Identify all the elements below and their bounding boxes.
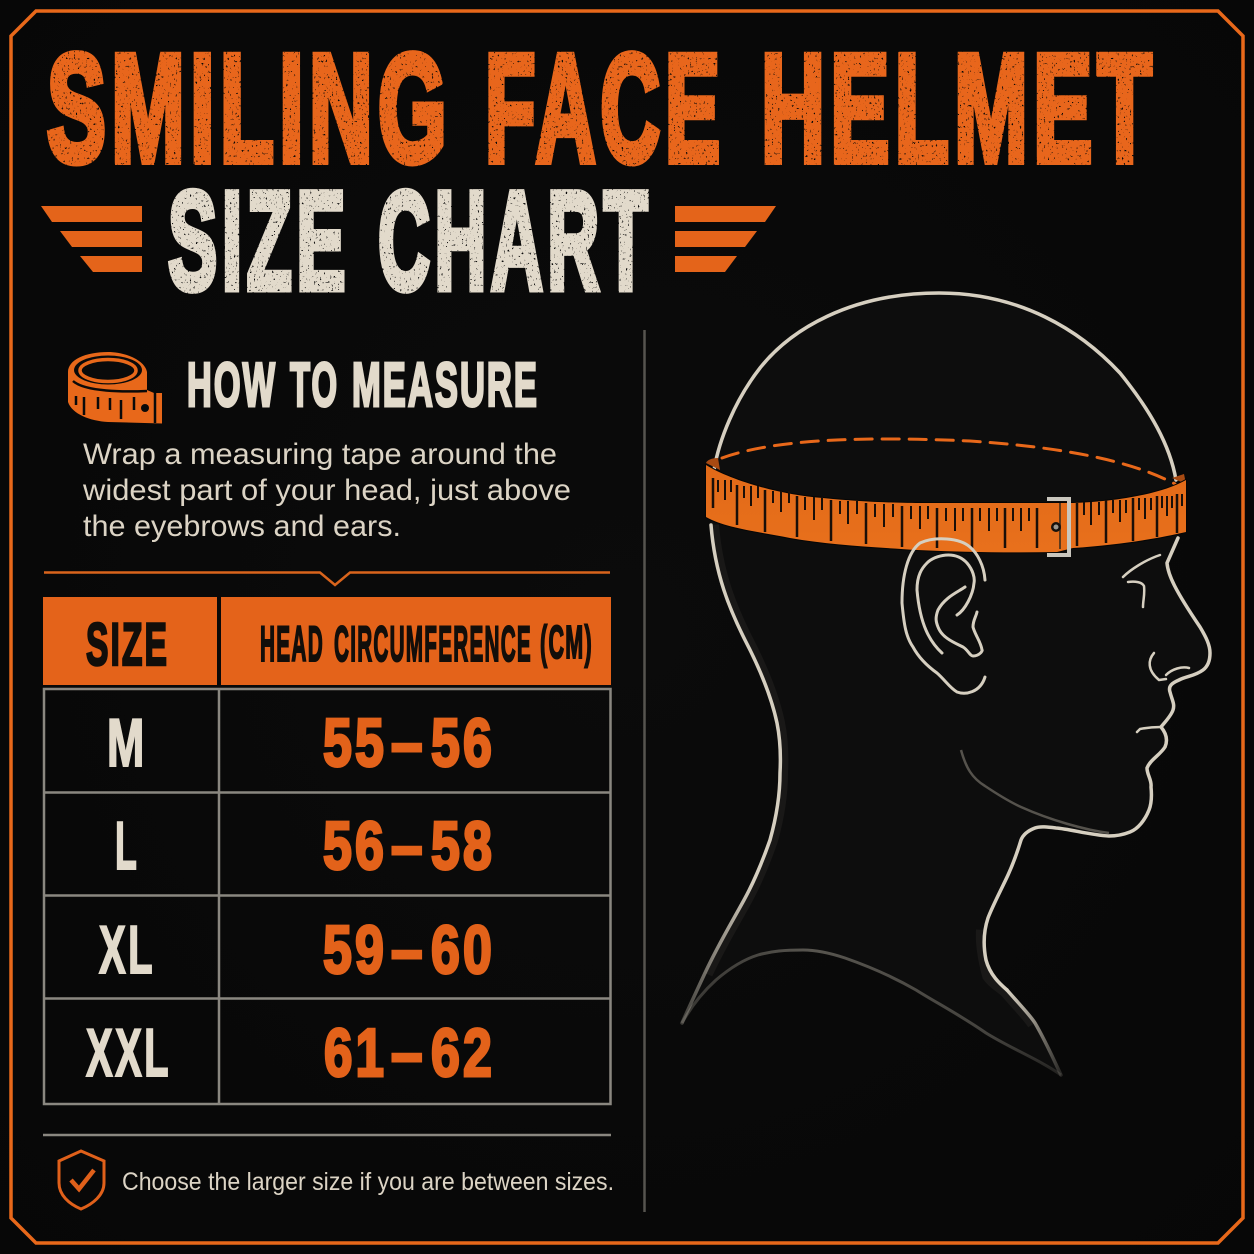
row XXL: XXL (86, 1015, 171, 1091)
row XXL: 62 (431, 1015, 495, 1091)
measuring instructions: the eyebrows and ears. (83, 510, 401, 543)
left ribbon stripes (41, 206, 142, 272)
row L: L (115, 808, 139, 884)
table header: (CM) (540, 616, 593, 668)
table header: HEAD (260, 616, 324, 672)
subtitle: CHART (378, 162, 652, 319)
ear (902, 539, 985, 693)
eye and brow (1123, 555, 1160, 607)
row XL: 60 (431, 912, 495, 988)
row XL (99, 912, 495, 988)
row XXL: – (391, 1015, 426, 1091)
tape buckle (1047, 499, 1069, 555)
heading: how to measure: TO (290, 351, 339, 420)
title: SMILING (47, 23, 452, 194)
head profile illustration (680, 290, 1220, 1080)
row XXL (86, 1015, 495, 1091)
measuring instructions: Wrap a measuring tape around the (83, 438, 557, 471)
title: FACE (485, 23, 725, 194)
row XL: 59 (323, 912, 387, 988)
title (47, 23, 1157, 194)
row M: M (107, 705, 147, 781)
nostril (1150, 653, 1189, 680)
row XXL: 61 (324, 1015, 387, 1091)
shoulder line (682, 950, 1061, 1075)
footer note: Choose the larger size if you are between sizes. (122, 1168, 614, 1196)
size table (43, 597, 611, 1104)
notched divider (44, 572, 610, 585)
heading: how to measure: HOW (187, 351, 277, 420)
skull outline (714, 293, 1176, 480)
table header: SIZE (86, 611, 169, 678)
mouth line (1137, 727, 1161, 732)
row M: 56 (431, 705, 495, 781)
face outline (984, 538, 1210, 990)
row M (107, 705, 495, 781)
icon: measuring tape (68, 352, 162, 424)
measuring instructions (82, 438, 571, 543)
right ribbon stripes (675, 206, 776, 272)
row M: 55 (323, 705, 387, 781)
row L: 56 (323, 808, 387, 884)
row XL: – (391, 912, 426, 988)
row L (115, 808, 495, 884)
neck front fade (1007, 990, 1061, 1075)
row XL: XL (99, 912, 155, 988)
dashed head circumference line (722, 439, 1175, 484)
vertical divider (643, 330, 646, 1212)
back of neck outline (682, 525, 780, 1023)
table header: CIRCUMFERENCE (334, 616, 532, 672)
row L: – (391, 808, 426, 884)
table header (43, 597, 611, 685)
heading: how to measure (187, 351, 539, 420)
footer divider (43, 1134, 611, 1136)
measuring tape band (706, 458, 1186, 552)
subtitle: SIZE (168, 162, 350, 319)
table grid (44, 689, 610, 1104)
row L: 58 (431, 808, 495, 884)
heading: how to measure: MEASURE (352, 351, 539, 420)
jaw line (961, 750, 1109, 833)
measuring instructions: widest part of your head, just above (82, 474, 571, 507)
head silhouette shading (706, 524, 1034, 1027)
tape ticks (713, 478, 1177, 548)
row M: – (391, 705, 426, 781)
icon: shield check (59, 1151, 104, 1209)
